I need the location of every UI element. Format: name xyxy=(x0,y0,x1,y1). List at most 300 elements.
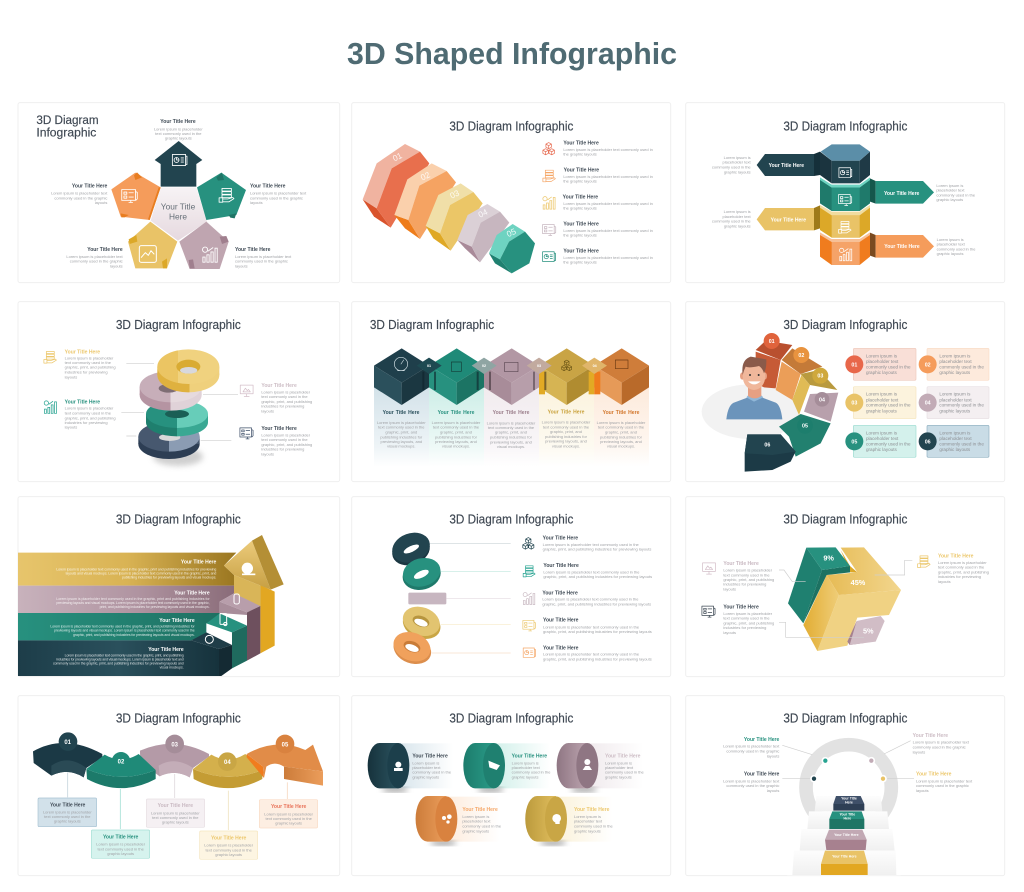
arc 02 teal xyxy=(86,754,156,788)
card 04: placeholder text xyxy=(939,397,972,402)
item: mauve xyxy=(240,383,312,413)
column text 2 xyxy=(432,410,481,449)
list item 2 xyxy=(523,563,652,579)
band and step: teal: Your Title Here xyxy=(159,618,195,624)
band and step: dark: Your Title Here xyxy=(148,647,184,653)
number diamonds: 04 xyxy=(593,364,598,368)
shadow under rings xyxy=(153,447,203,466)
list item 3: Your Title Here xyxy=(542,590,578,596)
item: teal xyxy=(44,399,116,430)
bottom left label: layouts xyxy=(110,263,123,268)
item: dark: Your Title Here xyxy=(723,604,759,610)
card 1: Lorem ipsum is placeholder xyxy=(43,809,92,814)
column text 3: Lorem ipsum is placeholder xyxy=(487,420,536,425)
label: teal: Lorem ipsum is placeholder text xyxy=(723,744,780,749)
card 05: Lorem ipsum is xyxy=(866,430,898,435)
list item 3: Lorem ipsum is placeholder text commonly used in xyxy=(563,201,653,206)
prism 04: 04 xyxy=(477,207,490,220)
item: teal: Your Title Here xyxy=(65,399,100,405)
ring: dark xyxy=(388,528,434,570)
teal block 9% xyxy=(788,547,850,623)
column text 2: Your Title Here xyxy=(438,410,475,416)
list item 1: Lorem ipsum is placeholder text commonly used in xyxy=(563,147,653,152)
item: teal: graphic, print, and publishing xyxy=(65,415,116,420)
card 2 xyxy=(91,830,150,858)
card 03: graphic layouts xyxy=(866,408,898,413)
card 1: Your Title Here xyxy=(50,802,86,808)
item: dark xyxy=(702,604,774,635)
item: yellow: industries for previewing xyxy=(938,574,981,579)
bottom right label: layouts xyxy=(235,263,248,268)
list item 5: Your Title Here xyxy=(563,249,599,255)
band and step: mauve: print, and publishing industries for previewing layouts and visual mockups. xyxy=(100,605,210,609)
item: dark: layouts xyxy=(723,630,736,635)
card 02: 02 xyxy=(925,362,931,368)
label lower left: commonly used in the xyxy=(712,219,751,224)
band and step: teal: graphic, print, and publishing industries for previewing layouts and visual mockups. xyxy=(73,633,195,637)
column fades xyxy=(374,387,649,467)
card 03: 03 xyxy=(851,401,857,407)
list item 1: graphic, print, and publishing industries for previewing layouts xyxy=(543,547,651,552)
orange arrow xyxy=(870,233,934,258)
card 1: text commonly used in the xyxy=(44,814,91,819)
band and step: teal xyxy=(18,613,247,668)
prism 01: 01 xyxy=(391,150,404,163)
list item 3: the graphic layouts xyxy=(563,206,597,211)
item: mauve: layouts xyxy=(723,587,736,592)
item: teal: layouts xyxy=(65,425,77,430)
item: yellow: graphic, print, and publishing xyxy=(938,569,989,574)
label upper right: commonly used in the xyxy=(936,192,976,197)
cylinder: orange: commonly used in the xyxy=(462,823,502,828)
label: dark: commonly used in the graphic xyxy=(726,783,779,788)
dark arrow xyxy=(757,152,820,176)
list item 1: Your Title Here xyxy=(543,536,578,542)
column text 5: Lorem ipsum is placeholder xyxy=(597,420,646,425)
cube: orange xyxy=(594,348,649,405)
bottom left label: Lorem ipsum is placeholder text xyxy=(66,254,124,259)
yellow arrow xyxy=(757,205,820,230)
segment 05 xyxy=(779,414,831,457)
label lower left: placeholder text xyxy=(723,214,752,219)
label: yellow: Lorem ipsum is placeholder text xyxy=(916,778,973,783)
number badges: 02 xyxy=(118,760,125,766)
card 01: placeholder text xyxy=(866,359,899,364)
band and step: dark xyxy=(18,632,232,676)
cylinder: teal xyxy=(463,743,551,792)
card 2: Lorem ipsum is placeholder xyxy=(96,842,146,847)
card 02: commonly used in the xyxy=(939,364,984,369)
cylinder: mauve: placeholder text xyxy=(605,765,634,770)
pentagon: mauve xyxy=(179,222,229,269)
list item 2: Lorem ipsum is placeholder text commonly used in xyxy=(563,174,653,179)
step: yellow xyxy=(821,851,868,875)
card 01: Lorem ipsum is xyxy=(866,353,898,358)
panel heading: Infographic xyxy=(36,126,96,140)
list item 2: the graphic layouts xyxy=(563,179,597,184)
list item 4 xyxy=(543,222,653,238)
segment 03: 03 xyxy=(817,374,823,380)
segment 01: 01 xyxy=(769,339,775,345)
left label: commonly used in the graphic xyxy=(54,195,107,200)
panel heading: 3D Diagram Infographic xyxy=(783,513,907,527)
card 4: Your Title Here xyxy=(211,835,247,841)
cylinder: dark: commonly used in the xyxy=(412,770,452,775)
segment 02: 02 xyxy=(798,353,804,359)
prism 05 xyxy=(489,224,535,273)
label upper right: Lorem ipsum is xyxy=(936,183,963,188)
label lower right: commonly used in the xyxy=(937,246,976,251)
band and step: dark: visual mockups. xyxy=(160,666,184,670)
band and step: teal: Lorem ipsum is placeholder text commonly used in the graphic, print, and publishing industries for xyxy=(50,624,195,628)
list item 4 xyxy=(523,618,652,634)
segment 06 xyxy=(745,434,796,472)
pentagon: teal xyxy=(197,173,246,220)
label upper left: Lorem ipsum is xyxy=(724,155,751,160)
column text 1: text commonly used in the xyxy=(378,425,425,430)
label lower left: graphic layouts xyxy=(724,223,751,228)
teal arrow: Your Title Here xyxy=(884,191,920,197)
right label: layouts xyxy=(250,200,263,205)
column text 4: visual mockups. xyxy=(552,443,580,448)
column text 1: Lorem ipsum is placeholder xyxy=(377,420,426,425)
label: dark xyxy=(723,772,780,793)
column text 4 xyxy=(542,410,591,448)
cylinder: dark: placeholder text xyxy=(412,765,441,770)
list item 5: the graphic layouts xyxy=(563,260,597,265)
label upper left: placeholder text xyxy=(723,160,752,165)
panel: cubes in columns xyxy=(352,302,671,482)
card 4: text commonly used in the xyxy=(206,847,253,852)
dark arrow: Your Title Here xyxy=(769,163,804,169)
cylinder: mauve: Lorem ipsum is xyxy=(605,760,632,765)
panel: tilted rings list xyxy=(352,497,671,677)
column text 3: graphic, print, and xyxy=(495,430,527,435)
number diamonds: 02 xyxy=(482,364,486,368)
list item 5 xyxy=(543,249,653,265)
item: yellow xyxy=(918,554,989,584)
list item 4: graphic, print, and publishing industries for previewing layouts xyxy=(543,629,652,634)
segment 02 xyxy=(776,347,822,400)
right label: commonly used in the graphic xyxy=(250,195,303,200)
panel heading: 3D Diagram Infographic xyxy=(783,318,907,332)
column text 1 xyxy=(377,410,426,449)
cylinder: orange xyxy=(416,796,502,845)
cylinder: dark xyxy=(368,743,453,792)
item: yellow: Lorem ipsum is placeholder xyxy=(65,355,114,360)
cylinder: teal: placeholder text xyxy=(512,765,541,770)
column text 1: graphic, print, and xyxy=(385,429,417,434)
ring dots xyxy=(811,758,886,782)
item: dark: Your Title Here xyxy=(261,426,297,432)
item: yellow: Lorem ipsum is placeholder xyxy=(938,560,987,565)
list item 2 xyxy=(543,168,653,184)
item: dark: graphic, print, and publishing xyxy=(723,620,774,625)
column text 5 xyxy=(597,410,646,449)
teal arrow xyxy=(870,178,934,204)
label: dark: Lorem ipsum is placeholder text xyxy=(723,778,780,783)
item: mauve: layouts xyxy=(261,408,274,413)
column text 1: publishing industries for xyxy=(380,434,423,439)
list item 4: the graphic layouts xyxy=(563,233,597,238)
card 05: 05 xyxy=(851,439,857,445)
label: mauve: commonly used in the graphic xyxy=(913,744,966,749)
prism 05: 05 xyxy=(505,226,518,239)
card 04: 04 xyxy=(925,401,931,407)
band and step: mauve: Your Title Here xyxy=(174,591,210,597)
connector lines xyxy=(779,560,912,637)
label lower right: graphic layouts xyxy=(937,251,963,256)
segment 01 xyxy=(756,333,792,388)
item: yellow: text commonly used in the xyxy=(65,360,112,365)
item: yellow: text commonly used in the xyxy=(938,565,985,570)
right label: Your Title Here xyxy=(250,183,286,189)
card 5: Lorem ipsum is placeholder xyxy=(264,811,314,816)
label: dark: Your Title Here xyxy=(744,772,780,778)
label: teal: Your Title Here xyxy=(744,737,780,743)
step: dark: Your Title xyxy=(841,796,857,800)
ring: mauve xyxy=(140,371,202,411)
main title: 3D Shaped Infographic xyxy=(347,36,677,71)
band and arrow: yellow: Your Title Here xyxy=(181,560,217,566)
bottom right label: commonly used in the graphic xyxy=(235,259,288,264)
column text 5: Your Title Here xyxy=(603,410,640,416)
top label xyxy=(154,119,203,141)
list item 2: Your Title Here xyxy=(543,563,579,569)
card 02 xyxy=(919,348,989,380)
card 2: text commonly used in the xyxy=(98,846,145,851)
item: dark: layouts xyxy=(261,451,274,456)
column text 5: graphic, print, and xyxy=(605,429,637,434)
column text 4: graphic, print, and xyxy=(550,429,582,434)
column text 1: previewing layouts, and xyxy=(381,439,422,444)
label: mauve: Lorem ipsum is placeholder text xyxy=(913,740,970,745)
item: mauve: text commonly used in the xyxy=(723,572,770,577)
cylinder: mauve xyxy=(557,743,645,792)
band and arrow: yellow: layouts and visual mockups. Lorem ipsum is placeholder text commonly used in the graphic, print, and xyxy=(66,571,216,575)
number diamonds: 01 xyxy=(427,364,431,368)
number badges: 04 xyxy=(224,760,231,766)
list item 1: Lorem ipsum is placeholder text commonly used in the xyxy=(543,542,640,547)
segment 03 xyxy=(792,368,837,415)
pentagon: yellow xyxy=(128,222,177,268)
number badges: 03 xyxy=(171,742,179,748)
card 5: text commonly used in the xyxy=(266,816,313,821)
item: mauve xyxy=(703,561,774,592)
arc 04 yellow xyxy=(193,754,262,788)
list item 5: Your Title Here xyxy=(543,645,579,651)
column text 4: previewing layouts, and xyxy=(545,439,587,444)
card 06: Lorem ipsum is xyxy=(939,430,971,435)
list item 4: Your Title Here xyxy=(563,222,599,228)
card 02: Lorem ipsum is xyxy=(939,353,971,358)
panel: pentagon diagram xyxy=(18,103,340,283)
item: yellow: layouts xyxy=(938,579,951,584)
item: dark xyxy=(240,426,312,456)
arc 05 orange arrow xyxy=(247,745,323,786)
label: teal: commonly used in the graphic xyxy=(726,748,779,753)
bottom right label: Your Title Here xyxy=(235,247,271,253)
cylinder: orange: Your Title Here xyxy=(462,807,498,813)
cylinder: teal: Lorem ipsum is xyxy=(512,760,539,765)
item: yellow: Your Title Here xyxy=(65,349,100,355)
card 3: graphic layouts xyxy=(162,820,189,825)
top label: Lorem ipsum is placeholder xyxy=(154,126,203,131)
cylinder: dark: Your Title Here xyxy=(412,753,448,759)
ring: dark xyxy=(138,422,200,459)
cylinder: teal: Your Title Here xyxy=(512,753,547,759)
card 04: commonly used in the xyxy=(939,403,984,408)
panel: wave ribbon xyxy=(18,696,340,876)
label: yellow: Your Title Here xyxy=(916,772,952,778)
card 1 xyxy=(38,798,97,827)
card 01 xyxy=(845,348,916,380)
cylinder: orange: placeholder text xyxy=(462,819,491,824)
card 3 xyxy=(146,799,205,827)
card 01: graphic layouts xyxy=(866,370,898,375)
column text 4: Lorem ipsum is placeholder xyxy=(542,420,591,425)
cylinder: yellow: commonly used in the xyxy=(574,823,614,828)
segment 05: 05 xyxy=(802,424,808,430)
column text 4: publishing industries for xyxy=(545,434,588,439)
ring: mauve xyxy=(408,593,446,604)
list item 5: Lorem ipsum is placeholder text commonly used in xyxy=(563,255,653,260)
mauve block 5%: 5% xyxy=(863,626,874,635)
band and step: dark: commonly used in the graphic, print, and publishing industries for previewing layouts and xyxy=(53,662,184,666)
orange segment xyxy=(820,232,870,265)
list item 2: graphic, print, and publishing industries for previewing layouts xyxy=(543,574,652,579)
pentagon: orange xyxy=(111,172,161,220)
panel heading: 3D Diagram Infographic xyxy=(116,513,241,527)
connector lines xyxy=(121,363,238,440)
list item 3: graphic, print, and publishing industries for previewing layouts xyxy=(542,601,651,606)
item: mauve: graphic, print, and publishing xyxy=(261,399,312,404)
panel heading: 3D Diagram Infographic xyxy=(370,318,494,332)
card 06 xyxy=(919,425,989,457)
card 2: graphic layouts xyxy=(107,851,134,856)
number badges xyxy=(59,732,294,771)
label: mauve xyxy=(913,733,970,754)
prism 03: 03 xyxy=(448,188,461,201)
right label xyxy=(250,183,307,205)
item: mauve: text commonly used in the xyxy=(261,394,308,399)
label lower left: Lorem ipsum is xyxy=(724,209,751,214)
item: dark: graphic, print, and publishing xyxy=(261,442,312,447)
card 02: graphic layouts xyxy=(939,370,971,375)
band and step: dark: industries for previewing layouts and visual mockups. Lorem ipsum is placeholder text and xyxy=(56,658,184,662)
item: mauve: Lorem ipsum is placeholder xyxy=(723,568,773,573)
card 5: Your Title Here xyxy=(271,804,307,810)
label: yellow: layouts xyxy=(916,788,929,793)
item: mauve: Lorem ipsum is placeholder xyxy=(261,389,311,394)
card 06: graphic layouts xyxy=(939,447,971,452)
left label: Lorem ipsum is placeholder text xyxy=(51,191,108,196)
cylinder: teal: commonly used in the xyxy=(512,770,551,775)
panel: staircase arrow xyxy=(18,497,340,677)
prism 01 xyxy=(363,144,429,228)
label lower right: Lorem ipsum is xyxy=(937,237,964,242)
bottom left label: Your Title Here xyxy=(87,247,123,253)
prism 02: 02 xyxy=(419,169,432,182)
item: yellow: graphic, print, and publishing xyxy=(65,365,116,370)
bottom left label: commonly used in the graphic xyxy=(70,259,123,264)
label: yellow: commonly used in the graphic xyxy=(916,783,969,788)
band and arrow: yellow: publishing industries for previewing layouts and visual mockups. xyxy=(122,575,216,579)
list item 1: the graphic layouts xyxy=(563,152,597,157)
label: mauve: layouts xyxy=(913,749,925,754)
list item 5: graphic, print, and publishing industries for previewing layouts xyxy=(543,656,652,661)
band and step: mauve: Lorem ipsum is placeholder text commonly used in the graphic, print and publishing industries for xyxy=(56,597,210,601)
dark top segment xyxy=(820,144,870,183)
arc 03 mauve xyxy=(140,744,209,777)
panel: percent blocks xyxy=(686,497,1005,677)
column text 2: Lorem ipsum is placeholder xyxy=(432,420,481,425)
backdrop ellipse xyxy=(702,384,800,439)
item: yellow xyxy=(44,349,116,379)
step: teal xyxy=(829,811,864,829)
teal segment xyxy=(820,177,870,211)
cube: dark xyxy=(374,348,429,405)
number diamonds xyxy=(417,358,607,374)
card 04 xyxy=(919,387,989,419)
connector strips xyxy=(422,372,600,394)
card 01: 01 xyxy=(851,362,857,368)
card 05 xyxy=(845,425,916,457)
ring: yellow xyxy=(399,602,445,644)
step: mauve xyxy=(825,830,867,850)
column text 2: graphic, print, and xyxy=(440,429,472,434)
list item 4: Lorem ipsum is placeholder text commonly used in the xyxy=(543,624,640,629)
mauve block 5% xyxy=(847,616,885,645)
label lower right: placeholder text xyxy=(937,242,966,247)
cylinder: yellow: Your Title Here xyxy=(574,807,610,813)
list item 4: Lorem ipsum is placeholder text commonly used in xyxy=(563,228,653,233)
ring: teal xyxy=(146,400,208,436)
panel heading: 3D Diagram Infographic xyxy=(449,119,573,133)
list item 3: Lorem ipsum is placeholder text commonly used in the xyxy=(542,597,639,602)
panel heading: 3D Diagram Infographic xyxy=(116,711,241,725)
column text 1: visual mockups. xyxy=(387,444,416,449)
left label: layouts xyxy=(95,200,107,205)
cylinder: yellow: graphic layouts xyxy=(574,828,601,833)
step: yellow: Your Title Here xyxy=(832,855,857,859)
ring: orange xyxy=(389,627,435,669)
item: mauve: Your Title Here xyxy=(261,383,297,389)
label: dark: layouts xyxy=(767,788,779,793)
cube: teal xyxy=(429,348,484,405)
yellow segment xyxy=(820,205,870,238)
cylinder: orange: Lorem ipsum is xyxy=(462,814,489,819)
card 03: commonly used in the xyxy=(866,403,911,408)
card 4 xyxy=(200,831,258,859)
ring: teal xyxy=(399,554,444,594)
label upper right: placeholder text xyxy=(936,188,965,193)
column text 3 xyxy=(487,410,536,449)
list item 5 xyxy=(523,645,652,661)
label: teal xyxy=(723,737,780,758)
column text 3: visual mockups. xyxy=(497,444,525,449)
band and step: mauve: previewing layouts and visual mockups. Lorem ipsum is placeholder text commonly used in the graphic, xyxy=(56,601,210,605)
bottom left label xyxy=(66,247,124,268)
column text 3: Your Title Here xyxy=(493,410,530,416)
cylinder: yellow xyxy=(525,796,614,845)
item: teal: text commonly used in the xyxy=(65,410,112,415)
column text 5: publishing industries for xyxy=(600,434,643,439)
segment 04 xyxy=(804,392,838,422)
top label: graphic layouts xyxy=(165,136,192,141)
segment 04: 04 xyxy=(819,397,825,403)
column text 3: publishing industries for xyxy=(490,435,533,440)
